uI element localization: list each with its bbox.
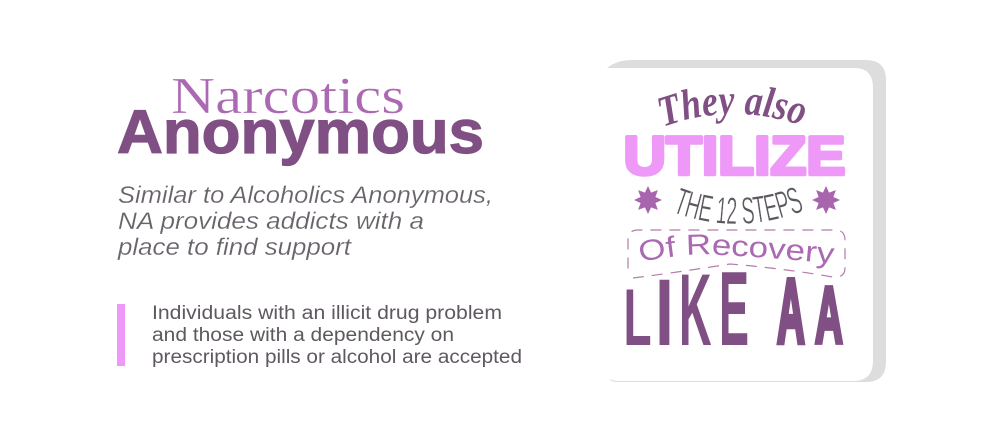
accent bar — [117, 304, 125, 366]
lettering: LIKE AA: K — [679, 253, 712, 367]
body text block — [152, 303, 522, 368]
lettering: LIKE AA: I — [655, 260, 674, 366]
body text block: prescription pills or alcohol are accepted — [152, 347, 522, 368]
lettering: THE 12 STEPS: THE 12 STEPS — [676, 187, 802, 224]
lettering: LIKE AA: E — [719, 250, 749, 368]
body text block: Individuals with an illicit drug problem — [152, 303, 502, 324]
lettering: Of Recovery: Of Recovery — [640, 234, 835, 268]
subtitle text block: NA provides addicts with a — [118, 208, 424, 235]
lettering: LIKE AA: A — [777, 260, 805, 362]
subtitle text block: place to find support — [117, 234, 352, 261]
lettering: UTILIZE: UTILIZE — [624, 124, 846, 186]
title line: Narcotics: Narcotics — [171, 68, 405, 125]
title line: Anonymous: Anonymous — [117, 98, 484, 166]
icon: left star — [634, 186, 662, 214]
icon: right star — [812, 186, 840, 214]
lettering: LIKE AA: A — [815, 271, 843, 360]
card shadow — [607, 60, 886, 382]
subtitle text block: Similar to Alcoholics Anonymous, — [118, 182, 493, 209]
card face — [606, 68, 873, 381]
panel: card — [607, 60, 886, 382]
title — [117, 68, 484, 166]
body text block: and those with a dependency on — [152, 325, 454, 346]
dashed banner — [628, 230, 845, 278]
lettering: LIKE AA — [624, 250, 843, 368]
lettering: They also: They also — [658, 87, 805, 126]
lettering: LIKE AA: L — [624, 271, 652, 362]
subtitle text block — [117, 182, 493, 261]
